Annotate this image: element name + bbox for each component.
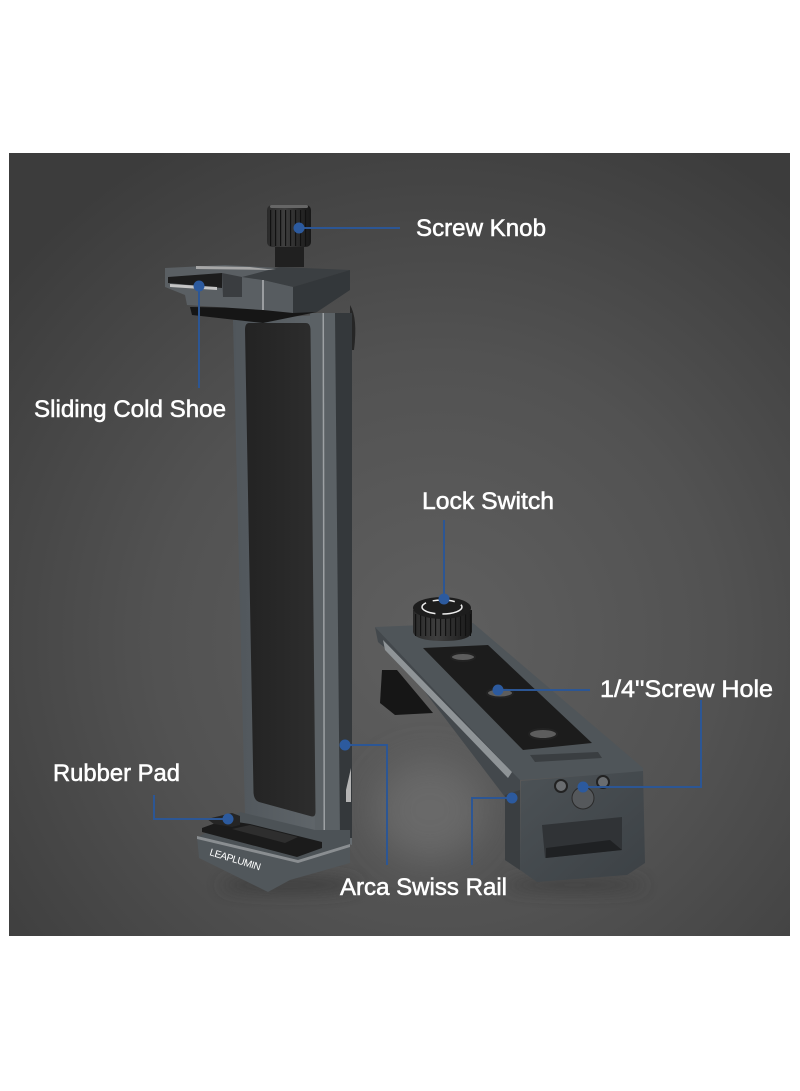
background panel	[9, 153, 790, 936]
top head	[165, 265, 350, 323]
product: vertical phone clamp	[165, 205, 360, 892]
front face	[520, 771, 645, 882]
callout: Sliding Cold Shoe: Sliding Cold Shoe	[34, 396, 226, 423]
callout: 1/4 Screw Hole: 1/4''Screw Hole	[600, 676, 773, 703]
side rail	[375, 627, 520, 870]
floor reflection	[375, 760, 485, 860]
callout: Arca Swiss Rail	[340, 740, 518, 901]
leather pad	[245, 323, 316, 816]
rubber stop	[207, 813, 240, 827]
right rail	[310, 313, 352, 838]
callout: Screw Knob	[294, 215, 546, 242]
callout: Sliding Cold Shoe	[34, 280, 226, 423]
base	[197, 812, 350, 892]
callout: Lock Switch	[422, 488, 554, 604]
callout: Screw Knob: Screw Knob	[416, 215, 546, 242]
callout: Lock Switch: Lock Switch	[422, 488, 554, 515]
floor shadow	[505, 879, 645, 891]
plate label	[530, 752, 602, 762]
callout: 1/4 Screw Hole	[492, 676, 773, 792]
screw knob	[267, 205, 311, 267]
clamp body	[233, 313, 352, 845]
top plate	[375, 623, 643, 780]
callout: Rubber Pad: Rubber Pad	[53, 760, 180, 787]
floor shadow	[220, 878, 360, 892]
rear side knob	[350, 305, 355, 350]
callout: Rubber Pad	[53, 760, 234, 824]
rubber strip	[423, 645, 592, 750]
logo text: LEAPLUMIN	[208, 847, 262, 873]
front holes	[555, 780, 567, 792]
rear black jaw	[380, 670, 433, 715]
window cutout	[542, 817, 622, 858]
screw holes	[451, 653, 557, 739]
callout: Arca Swiss Rail: Arca Swiss Rail	[340, 874, 507, 901]
product: horizontal clamp arm	[375, 597, 645, 891]
lock knob	[413, 597, 472, 641]
